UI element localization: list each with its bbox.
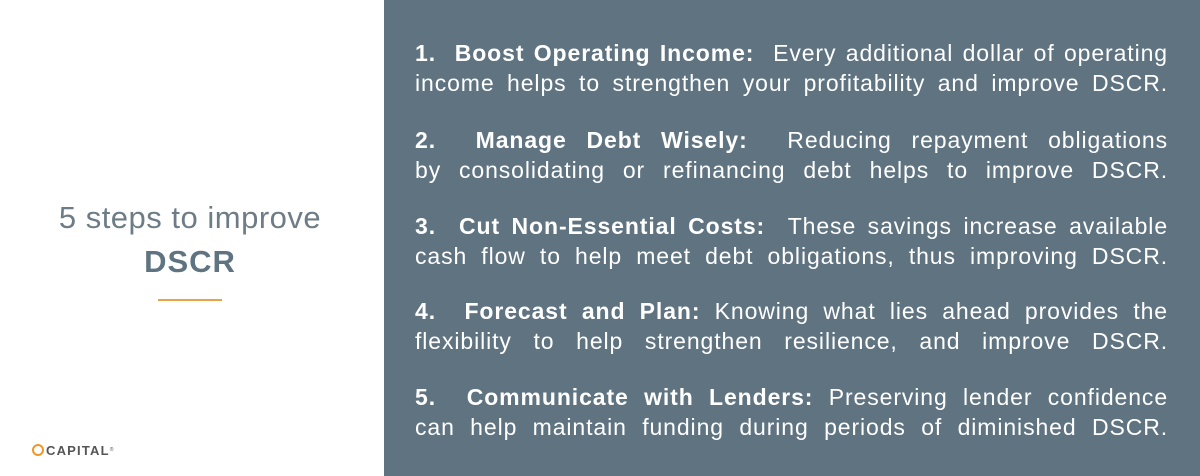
step 5: can help maintain funding during periods of diminished DSCR. bbox=[415, 414, 1168, 440]
step 3: 3. Cut Non-Essential Costs: These savings increase available bbox=[415, 213, 1168, 239]
step 4: 4. Forecast and Plan: Knowing what lies ahead provides the bbox=[415, 298, 1168, 324]
panel: steps bbox=[384, 0, 1200, 476]
step 2: 2. Manage Debt Wisely: Reducing repayment obligations bbox=[415, 127, 1168, 153]
step 4: flexibility to help strengthen resilience, and improve DSCR. bbox=[415, 328, 1168, 354]
title: 5 steps to improve DSCR: 5 steps to improve bbox=[59, 200, 321, 235]
step 1 bbox=[415, 40, 1168, 96]
logo: eCapital: ® bbox=[110, 447, 113, 453]
step 3: cash flow to help meet debt obligations, thus improving DSCR. bbox=[415, 243, 1168, 269]
title: 5 steps to improve DSCR: DSCR bbox=[144, 244, 236, 279]
step 4 bbox=[415, 298, 1168, 354]
step 1: 1. Boost Operating Income: Every additional dollar of operating bbox=[415, 40, 1168, 66]
step 5: 5. Communicate with Lenders: Preserving lender confidence bbox=[415, 384, 1168, 410]
title: 5 steps to improve DSCR bbox=[59, 200, 321, 279]
step 1: income helps to strengthen your profitability and improve DSCR. bbox=[415, 70, 1168, 96]
step 5 bbox=[415, 384, 1168, 440]
orange divider bbox=[158, 299, 222, 301]
logo: eCapital: CAPITAL bbox=[46, 442, 110, 458]
step 3 bbox=[415, 213, 1168, 269]
step 2 bbox=[415, 127, 1168, 183]
step 2: by consolidating or refinancing debt helps to improve DSCR. bbox=[415, 157, 1168, 183]
